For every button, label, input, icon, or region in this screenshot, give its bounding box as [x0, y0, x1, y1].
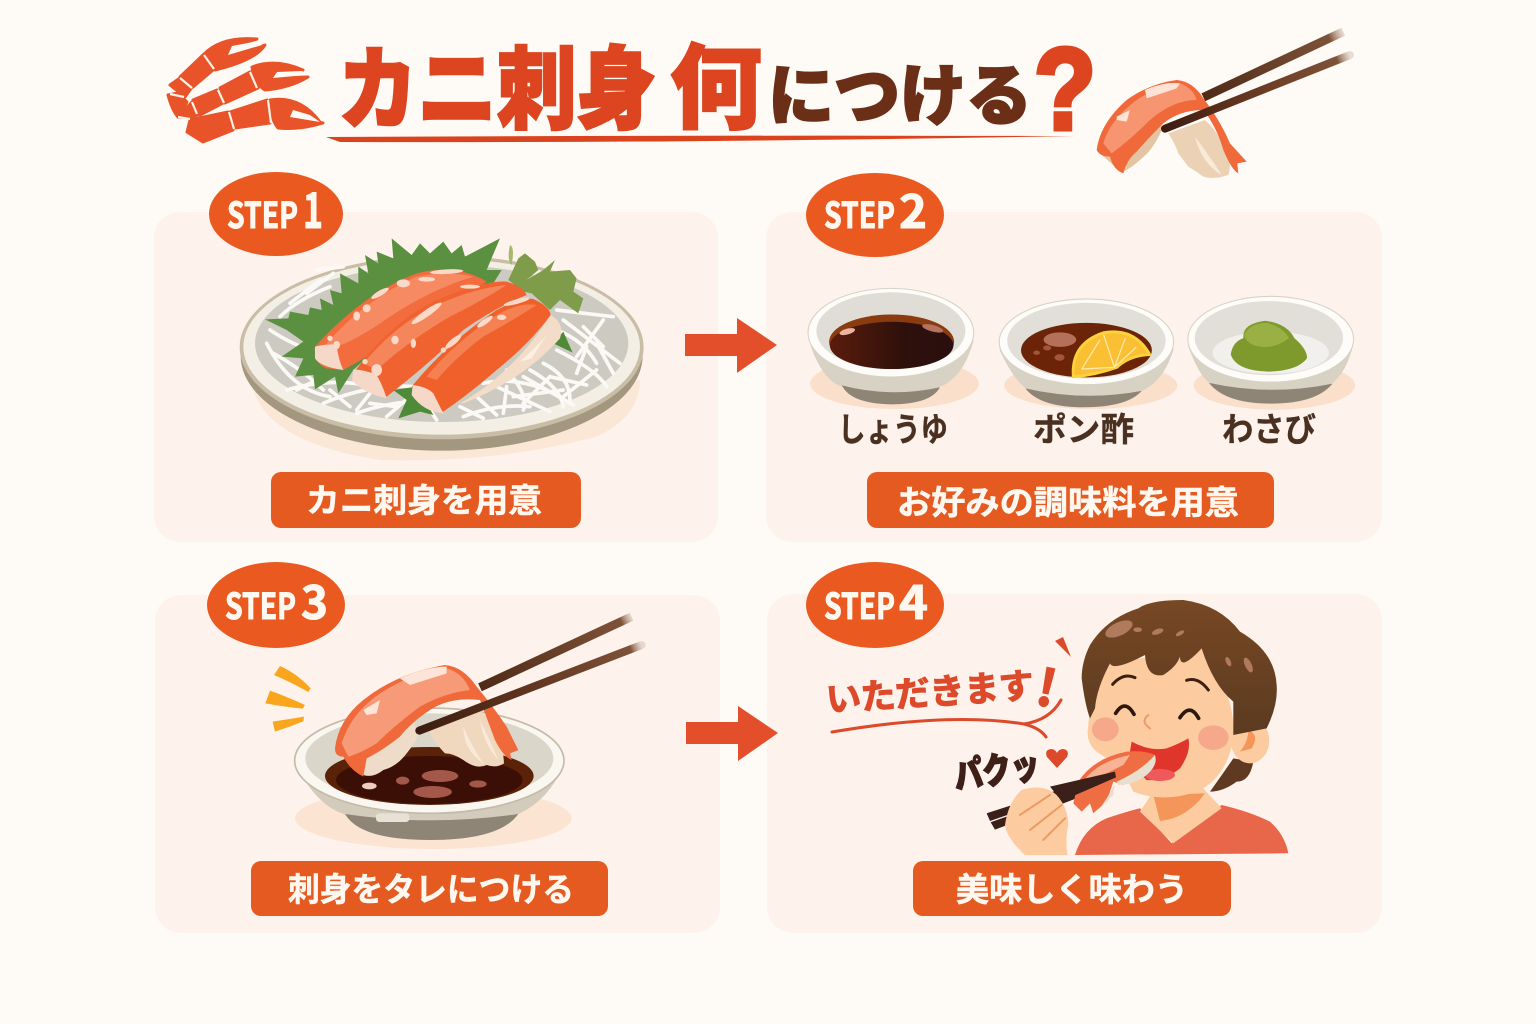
- step 2 badge: 2: [899, 176, 927, 242]
- rice: [350, 710, 418, 776]
- illustration: person eating: [987, 600, 1288, 855]
- step 1 badge: [209, 172, 343, 256]
- speech: いただきます: いただきます: [824, 658, 1035, 723]
- panel: step 4: [767, 562, 1382, 933]
- title: 何: 何: [670, 15, 762, 148]
- hair: [1082, 600, 1277, 735]
- step 3 badge: [207, 562, 345, 648]
- panel: step 2: [766, 173, 1382, 542]
- icon: nigiri with chopsticks: [1097, 32, 1350, 178]
- title underline: [326, 136, 1075, 142]
- label: step 3: 刺身をタレにつける: [288, 863, 574, 911]
- panel: step 1: [154, 172, 718, 542]
- label: step 1: カニ刺身を用意: [306, 474, 542, 522]
- step 4 badge: 4: [899, 567, 928, 633]
- shirt: [1075, 805, 1288, 855]
- panel: step 3: [155, 562, 720, 933]
- title block: [168, 15, 1350, 178]
- crab topping: [335, 665, 518, 777]
- mouth: [1130, 738, 1189, 780]
- label: step 2: お好みの調味料を用意: [897, 476, 1239, 524]
- crab stick back: [315, 270, 487, 370]
- illustration: crab sashimi plate: [240, 238, 644, 460]
- title: question mark: ?: [1034, 24, 1096, 154]
- speech swoosh: [832, 700, 1061, 737]
- step 2 badge: [806, 173, 944, 257]
- illustration: dipping sushi in sauce: [265, 617, 642, 849]
- arrow: step 1 to step 2: [685, 318, 777, 373]
- step 4 badge: STEP: [824, 578, 895, 630]
- lemon wedge: [1073, 332, 1150, 377]
- label: ポン酢: ポン酢: [1033, 403, 1134, 451]
- face features: [1113, 676, 1208, 690]
- accent mark: [1055, 637, 1071, 657]
- label: しょうゆ: しょうゆ: [838, 403, 948, 451]
- title: カニ刺身: カニ刺身: [338, 17, 656, 147]
- speech: exclamation: !: [1031, 648, 1064, 722]
- label: step 1: [271, 472, 581, 528]
- step 4 badge: [806, 562, 944, 648]
- title: につける: につける: [768, 43, 1032, 139]
- sound effect: パクッ: パクッ: [950, 736, 1043, 800]
- illustration: wasabi dish: [1188, 296, 1355, 410]
- step 2 badge: STEP: [824, 187, 895, 239]
- front chopstick: [419, 645, 642, 731]
- sushi bite: [1073, 751, 1155, 813]
- step 3 badge: STEP: [225, 578, 296, 630]
- crab stick middle: [353, 282, 527, 397]
- rear chopstick: [480, 617, 632, 687]
- icon: heart: [1046, 749, 1068, 768]
- illustration: ponzu dish: [999, 299, 1177, 409]
- meat highlights: [327, 268, 530, 376]
- hand: [1005, 788, 1068, 855]
- shiso leaves: [265, 238, 502, 393]
- label: step 2: [867, 472, 1274, 528]
- crab stick front: [460, 315, 561, 403]
- arrow: step 3 to step 4: [686, 706, 778, 761]
- herb sprig: [508, 253, 583, 313]
- label: わさび: わさび: [1222, 403, 1316, 451]
- step 3 badge: 3: [301, 567, 328, 633]
- face: [1088, 648, 1234, 797]
- step 1 badge: STEP: [227, 187, 298, 239]
- ear: [1231, 718, 1269, 763]
- chopsticks: [987, 772, 1116, 821]
- label: step 4: 美味しく味わう: [956, 863, 1188, 911]
- label: step 4: [913, 861, 1231, 916]
- burst lines: [274, 666, 311, 692]
- icon: crab claws: [168, 39, 323, 142]
- illustration: soy sauce dish: [808, 288, 979, 409]
- step 1 badge: 1: [303, 172, 323, 242]
- shredded daikon: [267, 267, 620, 420]
